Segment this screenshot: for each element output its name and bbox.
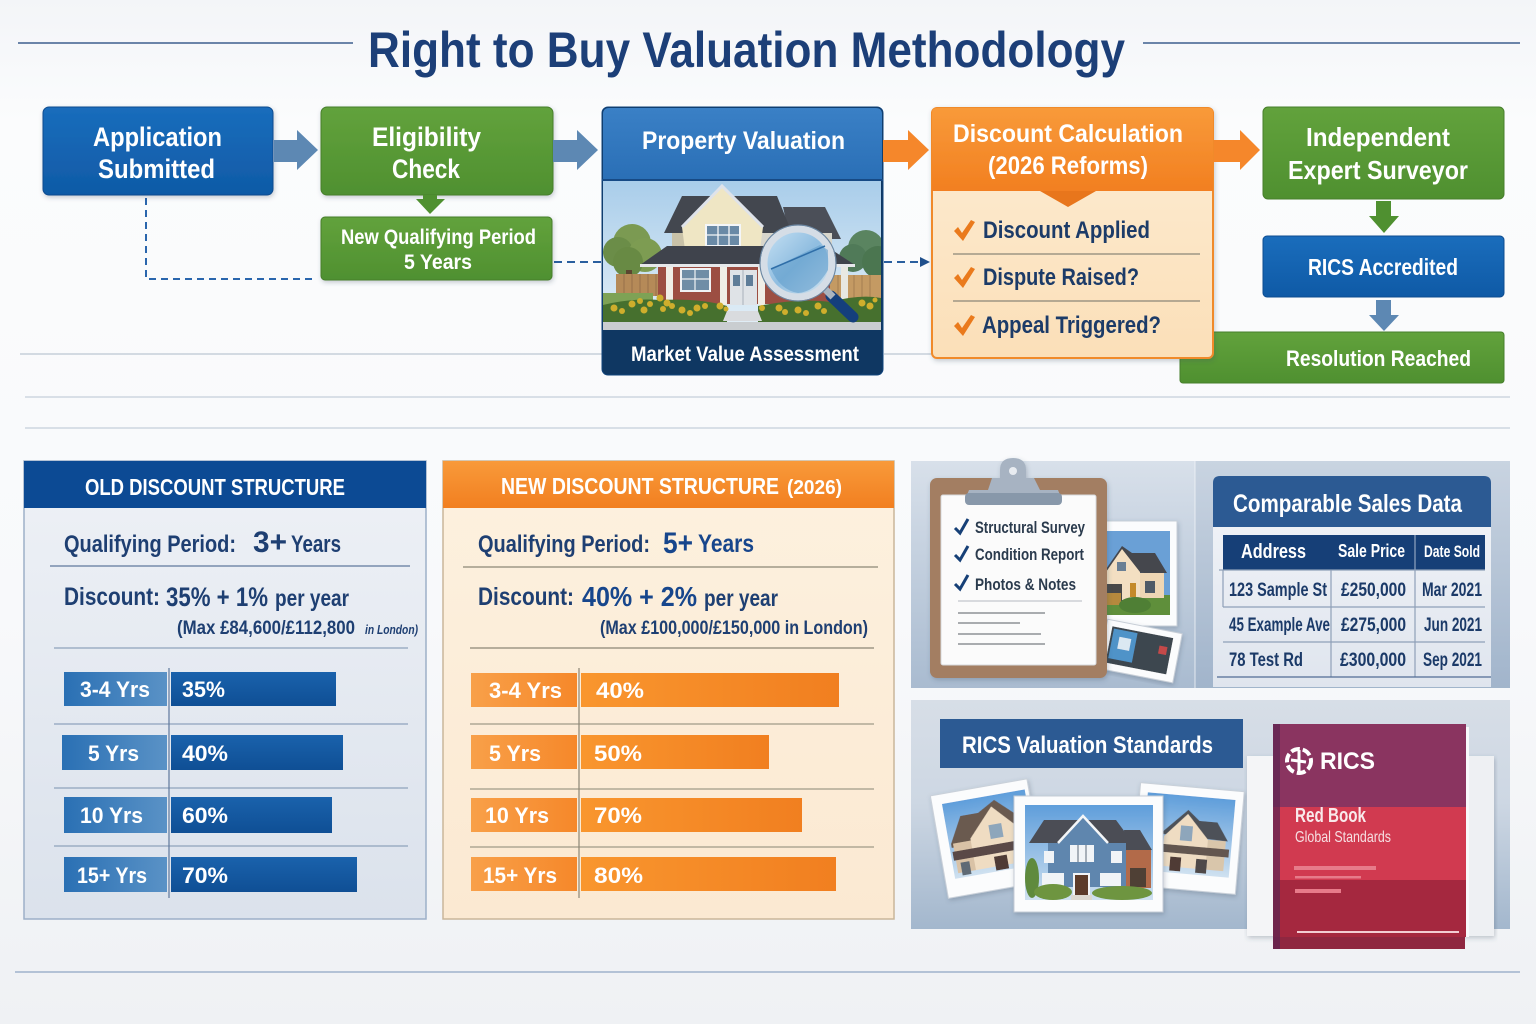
house illustration with magnifier [603,181,894,330]
step: property valuation [602,107,894,375]
comparable sales table: £275,000 [1341,615,1406,636]
new bar chart: 5 Yrs [489,741,541,766]
photo: right house [1132,783,1244,894]
old discount rate: Discount: [64,583,160,611]
comparable sales table: 78 Test Rd [1229,650,1303,671]
arrow: eligibility down [416,195,445,214]
old qualifying period [64,526,341,559]
step: rics accredited: RICS Accredited [1308,254,1458,280]
new qualifying period: Years [698,530,754,558]
comparable sales table: Sale Price [1338,541,1405,561]
new discount rate: Discount: [478,583,574,611]
old bar chart: 10 Yrs [80,803,143,828]
new bar chart: 40% [596,678,644,703]
comparable sales table: Sep 2021 [1423,650,1482,671]
dashed connector: qualifying period to valuation [554,261,601,263]
comparable sales table [1213,476,1491,687]
step: application submitted: Submitted [98,154,215,184]
valuation header: Property Valuation [642,127,845,155]
panel: old discount structure [24,461,426,919]
photo: left house [930,779,1045,898]
old bar chart: 35% [182,677,225,702]
panel: survey and comparable sales [911,458,1510,688]
table heading [1213,476,1491,527]
checklist text: Condition Report [975,545,1084,564]
discount header: (2026 Reforms) [988,152,1148,180]
item: dispute raised: Dispute Raised? [983,264,1139,291]
comparable sales table: Mar 2021 [1422,580,1482,601]
book title [1295,805,1391,846]
old bar chart: 5 Yrs [88,741,139,766]
comparable sales table: Jun 2021 [1424,615,1482,636]
new bar chart [471,673,839,891]
red book [1247,724,1494,949]
new qualifying period: Qualifying Period: [478,531,650,558]
item: appeal triggered: Appeal Triggered? [982,312,1161,339]
step: new qualifying period [321,217,552,280]
new bar chart: 3-4 Yrs [489,678,562,703]
new qualifying period: 5+ [663,527,693,560]
comparable sales table: £250,000 [1341,580,1406,601]
new discount rate [478,581,868,639]
arrow: application to eligibility [274,130,318,170]
step: new qualifying period: 5 Years [404,251,472,274]
new discount rate: 40% + 2% [582,581,697,612]
step: application submitted: Application [93,122,222,152]
old bar chart: 3-4 Yrs [80,677,150,702]
photo: house print [1096,521,1182,683]
old discount rate: per year [275,585,349,611]
new discount rate: (Max £100,000/£150,000 in London) [600,618,868,639]
old bar chart: 40% [182,741,228,766]
new bar chart: 70% [594,803,642,828]
old discount rate: 35% + 1% [166,582,268,612]
valuation footer: Market Value Assessment [631,343,859,366]
old discount rate: in London) [365,622,418,637]
old bar chart: 70% [182,863,228,888]
checklist text: Photos & Notes [975,575,1076,594]
dashed arrow: valuation to discount [884,257,930,267]
new heading: NEW DISCOUNT STRUCTURE [501,473,779,499]
step: resolution reached [1180,332,1504,383]
new discount rate: per year [704,585,778,611]
clipboard checklist [930,458,1107,678]
new qualifying period [478,527,754,560]
magnifier [760,225,853,317]
book title: Global Standards [1295,829,1391,846]
old bar chart [62,672,357,892]
notch [1040,191,1096,207]
old heading [24,461,426,508]
rics logo [1287,748,1375,775]
rics logo: RICS [1320,748,1375,775]
old bar chart: 60% [182,803,228,828]
old bar chart: 15+ Yrs [77,863,147,888]
comparable sales table: Address [1241,541,1306,563]
step: independent expert surveyor: Expert Surveyor [1288,155,1468,185]
comparable sales table: £300,000 [1340,650,1406,671]
old heading: OLD DISCOUNT STRUCTURE [85,474,345,500]
arrow: discount to surveyor [1214,130,1260,170]
comparable sales table: Date Sold [1424,542,1480,561]
dashed connector: application to qualifying period [146,198,312,279]
photo: centre house [1014,796,1163,912]
arrow: eligibility to valuation [553,130,598,170]
old qualifying period: Years [291,531,341,558]
step: eligibility check: Check [392,154,461,184]
new bar chart: 10 Yrs [485,803,549,828]
new bar chart: 15+ Yrs [483,863,557,888]
rics heading [940,719,1243,768]
arrow: surveyor down [1369,201,1399,233]
table heading: Comparable Sales Data [1233,490,1463,518]
old discount rate [64,582,418,639]
arrow: accredited down [1369,300,1399,331]
step: eligibility check: Eligibility [372,122,481,152]
item: discount applied: Discount Applied [983,217,1150,244]
discount header: Discount Calculation [953,120,1183,148]
arrow: valuation to discount [883,130,929,170]
title: Right to Buy Valuation Methodology [368,22,1125,78]
step: application submitted [43,107,273,195]
comparable sales table: 123 Sample St [1229,580,1328,601]
step: independent expert surveyor [1263,107,1504,199]
step: eligibility check [321,107,553,195]
new bar chart: 80% [594,863,643,888]
rics heading: RICS Valuation Standards [962,732,1213,759]
new bar chart: 50% [594,741,642,766]
old qualifying period: Qualifying Period: [64,531,236,558]
discount header [932,108,1213,191]
book title: Red Book [1295,805,1367,827]
checklist text: Structural Survey [975,518,1085,537]
step: resolution reached: Resolution Reached [1286,346,1471,371]
step: independent expert surveyor: Independent [1306,122,1450,152]
panel: rics valuation standards [911,700,1510,949]
panel: new discount structure [443,461,894,919]
old discount rate: (Max £84,600/£112,800 [177,618,355,639]
step: rics accredited [1263,236,1504,297]
new heading: (2026) [787,477,842,499]
new heading [443,461,894,508]
valuation header [602,108,883,180]
step: discount calculation [932,108,1213,358]
valuation footer [603,330,882,374]
step: new qualifying period: New Qualifying Period [341,226,536,249]
checklist text [955,518,1085,594]
old qualifying period: 3+ [253,526,287,559]
comparable sales table: 45 Example Ave [1229,615,1330,636]
clip [965,458,1062,505]
